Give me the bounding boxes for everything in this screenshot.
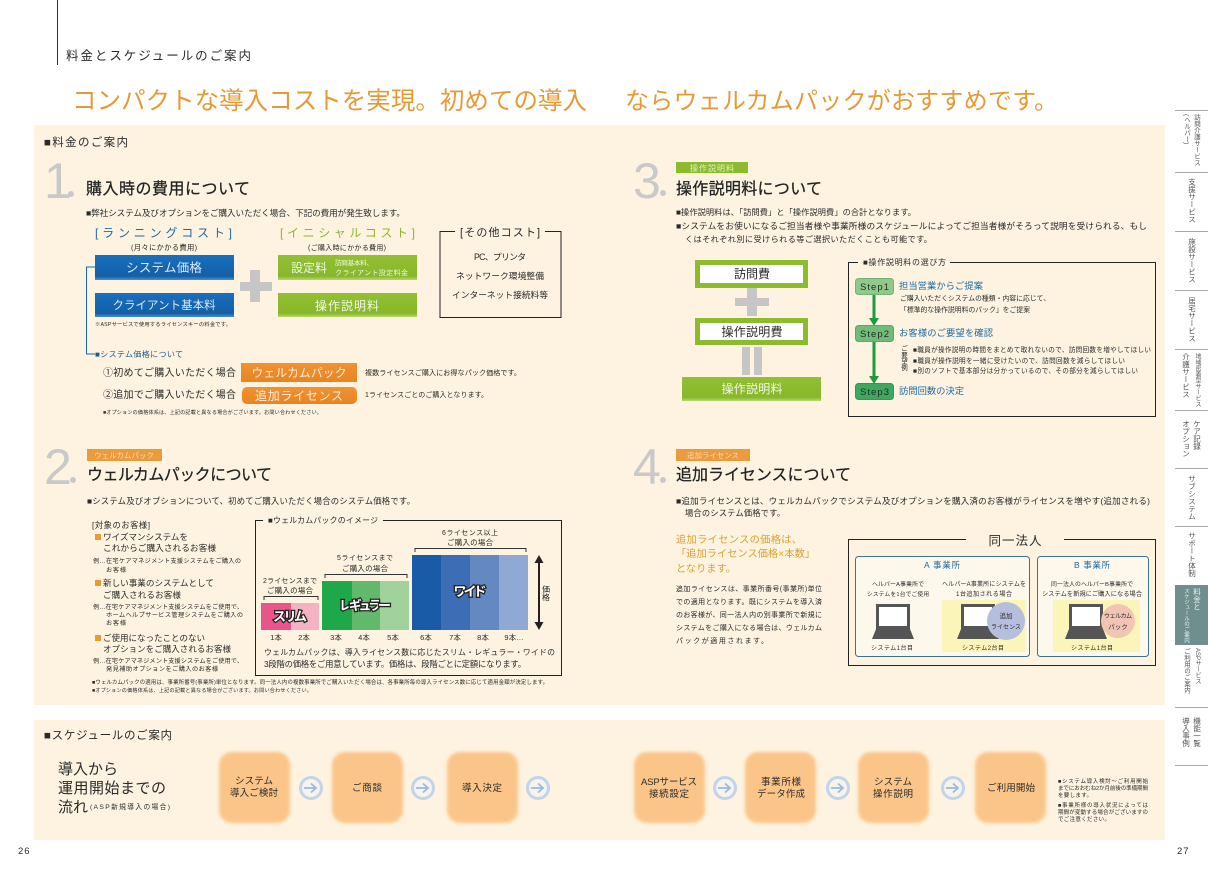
section 3 intro: ■システムをお使いになるご担当者様や事業所様のスケジュールによってご担当者様がそろって説明を受けられる、もし [676, 220, 1147, 231]
formula diagram [682, 262, 821, 401]
system price notes: ①初めてご購入いただく場合 [103, 366, 236, 379]
side navigation tabs: サポート体制 [1187, 532, 1196, 578]
section 4 intro: ■追加ライセンスとは、ウェルカムパックでシステム及びオプションを購入済のお客様がライセンスを増やす(追加される) [676, 495, 1150, 506]
section 4 heading: 追加ライセンスについて [676, 466, 851, 484]
schedule note: ■事業所様の導入状況によっては [1058, 801, 1148, 809]
chart: welcome pack image: ■ウェルカムパックのイメージ [268, 516, 378, 525]
active tab [1175, 585, 1208, 645]
icon: laptop with welcome pack: ウェルカム [1104, 612, 1132, 620]
formula diagram: 操作説明費 [722, 324, 782, 339]
brackets and tier captions: 5ライセンスまで [337, 554, 393, 562]
step 2: ■職員が操作説明を一緒に受けたいので、訪問回数を減らしてほしい [913, 356, 1125, 365]
arrow [828, 778, 848, 798]
running cost column: クライアント基本料 [112, 298, 216, 312]
side navigation tabs: 訪問介護サービス [1192, 113, 1201, 166]
initial cost column: 操作説明料 [315, 298, 379, 313]
step arrows [872, 294, 876, 377]
system price notes: 追加ライセンス [255, 388, 343, 403]
side navigation tabs: 支援サービス [1187, 177, 1196, 223]
target customers list: ご使用になったことのない [103, 633, 205, 643]
same corporation diagram: 同一法人 [988, 534, 1042, 548]
target customers list: ホームヘルプサービス管理システムをご購入の [106, 611, 243, 619]
section 4 paragraph: 追加ライセンスは、事業所番号(事業所)単位 [676, 584, 822, 593]
office A: A 事業所 [924, 560, 960, 570]
section 1 heading: 購入時の費用について [86, 180, 250, 198]
step: operation training [858, 752, 929, 823]
section 4 paragraph: パックが適用されます。 [676, 636, 768, 645]
license counts: 5本 [387, 632, 399, 642]
running cost column [95, 226, 234, 328]
section 2 heading: ウェルカムパックについて [87, 466, 272, 484]
target customers list: 発見補助オプションをご購入のお客様 [106, 665, 219, 673]
side navigation tabs: ケア記録 [1192, 420, 1202, 450]
section 2 footnote: ■ウェルカムパックの適用は、事業所番号(事業所)単位となります。同一法人内の複数事業所でご購入いただく場合は、各事業所毎の導入ライセンス数に応じて適用金額が決定します。 [92, 678, 548, 686]
target customers list: 例…在宅ケアマネジメント支援システムをご使用で、 [93, 603, 243, 611]
system price notes: ■オプションの価格体系は、上記の記載と異なる場合がございます。お問い合わせください。 [103, 409, 322, 416]
heading: pricing guide: ■料金のご案内 [44, 135, 128, 149]
other costs box: インターネット接続料等 [452, 289, 548, 300]
step 2: ご要望例 [900, 344, 908, 372]
target customers list: これからご購入されるお客様 [103, 542, 216, 553]
running cost column: ※ASPサービスで使用するライセンスキーの料金です。 [95, 320, 231, 328]
target customers list: 例…在宅ケアマネジメント支援システムをご購入の [93, 557, 241, 565]
heading: schedule guide: ■スケジュールのご案内 [44, 728, 172, 742]
side navigation tabs: サブシステム [1187, 475, 1196, 520]
step 2: ■職員が操作説明の時間をまとめて取れないので、訪問回数を増やしてほしい [913, 345, 1151, 354]
schedule lead text [58, 761, 170, 816]
section 3 intro: くはそれぞれ別に受けられる等ご選択いただくことも可能です。 [685, 234, 932, 244]
system price notes: ②追加でご購入いただく場合 [103, 388, 236, 401]
step 2: Step2 [860, 329, 889, 340]
schedule note: でご注意ください。 [1058, 815, 1110, 823]
arrow [714, 778, 736, 798]
section 2 number: 2 [44, 439, 72, 495]
price callout: となります。 [676, 563, 736, 575]
target customers list: お客様 [106, 566, 127, 574]
step: office data: データ作成 [757, 788, 805, 800]
office B: システムを新規にご購入になる場合 [1042, 590, 1143, 598]
step: consultation: ご商談 [352, 782, 382, 794]
other costs box: PC、プリンタ [474, 252, 526, 262]
running cost column: [ランニングコスト] [95, 226, 232, 240]
step: operation training: システム [874, 777, 912, 788]
section 3 intro [676, 207, 1147, 244]
header rule and section label: 料金とスケジュールのご案内 [66, 48, 251, 63]
tag: operation fee: 操作説明料 [690, 163, 734, 173]
step 2: お客様のご要望を確認 [899, 327, 994, 338]
target customers list: お客様 [106, 619, 127, 627]
step: ASP connection [634, 752, 705, 823]
office A: システムを1台でご使用 [867, 590, 929, 598]
page numbers: 26 [18, 846, 31, 857]
office A [856, 556, 1030, 656]
price arrow: 価格 [542, 584, 550, 602]
connector line [86, 267, 95, 354]
regular bars: レギュラー [339, 598, 391, 613]
tag: welcome pack [87, 449, 162, 461]
initial cost column: 訪問基本料、 [335, 258, 373, 267]
license counts: 6本 [420, 632, 432, 642]
selection steps box: ■操作説明料の選び方 [863, 257, 946, 267]
step: office data: 事業所様 [761, 776, 801, 788]
step 3: 訪問回数の決定 [899, 385, 964, 396]
icon: laptop with welcome pack [1065, 604, 1135, 639]
other costs box: ネットワーク環境整備 [456, 270, 544, 281]
office A: システム1台目 [871, 644, 913, 652]
section 3 number: 3 [633, 153, 661, 209]
price arrow [534, 555, 550, 630]
schedule note: ■システム導入検討〜ご利用開始 [1058, 777, 1148, 785]
license counts: 9本… [504, 632, 524, 642]
step 3 [856, 384, 964, 400]
system price notes: 1ライセンスごとのご購入となります。 [365, 390, 488, 399]
section 1 number: 1 [44, 153, 72, 209]
chart description [264, 647, 555, 669]
system price notes: ■システム価格について [95, 349, 183, 359]
regular bars [322, 581, 409, 630]
office B: システム1台目 [1071, 644, 1113, 652]
step: system review: 導入ご検討 [230, 787, 278, 799]
chart description: ウェルカムパックは、導入ライセンス数に応じたスリム・レギュラー・ワイドの [264, 647, 555, 657]
price callout [676, 533, 815, 575]
brackets and tier captions: 2ライセンスまで [263, 577, 317, 585]
step 1: 担当営業からご提案 [899, 280, 984, 291]
brackets and tier captions [263, 528, 526, 600]
target customers list: ワイズマンシステムを [103, 531, 188, 542]
side navigation tabs: 機能一覧 [1192, 716, 1202, 748]
icon: laptop with welcome pack: パック [1108, 623, 1128, 631]
wide bars [412, 555, 528, 630]
schedule note: を要します。 [1058, 792, 1092, 799]
icon: laptop with additional license [957, 602, 1025, 640]
chart: welcome pack image [256, 514, 562, 676]
side navigation tabs: ASPサービス [1194, 648, 1201, 684]
office A: システム2台目 [962, 644, 1004, 652]
step 2: ■別のソフトで基本部分は分かっているので、その部分を減らしてほしい [913, 366, 1138, 375]
section 2 footnote: ■オプションの価格体系は、上記の記載と異なる場合がございます。お問い合わせください。 [92, 687, 312, 694]
side navigation tabs: 導入事例 [1181, 716, 1190, 748]
office A: 1台追加される場合 [956, 590, 1013, 598]
running cost column: システム価格 [126, 260, 202, 275]
chart description: 3段階の価格をご用意しています。価格は、段階ごとに定額になります。 [264, 659, 526, 669]
license counts: 3本 [330, 632, 342, 642]
running cost column: (月々にかかる費用) [131, 243, 197, 252]
schedule lead text: 流れ [58, 799, 88, 816]
icon: laptop with additional license: 追加 [1000, 611, 1012, 620]
section 4 paragraph: システムをご購入になる場合は、ウェルカム [676, 623, 822, 632]
side navigation tabs: 居宅サービス [1187, 297, 1196, 342]
icon: laptop with additional license: ライセンス [991, 624, 1021, 631]
slim bars [261, 603, 319, 630]
step 1 [856, 278, 1050, 314]
schedule lead text: 運用開始までの [58, 780, 166, 797]
main title: ならウェルカムパックがおすすめです。 [625, 88, 1058, 115]
step 3: Step3 [860, 387, 889, 398]
target customers list: [対象のお客様] [92, 520, 150, 530]
license counts: 8本 [477, 632, 489, 642]
section 1 intro: ■弊社システム及びオプションをご購入いただく場合、下記の費用が発生致します。 [86, 207, 405, 218]
step: ASP connection: ASPサービス [641, 777, 697, 788]
side navigation tabs [1175, 110, 1208, 766]
license counts: 7本 [449, 632, 461, 642]
panel: section 2 welcome pack [44, 439, 562, 694]
office A: ヘルパーA事業所で [872, 580, 924, 588]
arrow [528, 778, 548, 798]
wide bars: ワイド [454, 584, 486, 599]
step: ASP connection: 接続設定 [649, 788, 689, 800]
price callout: 追加ライセンスの価格は、 [676, 533, 802, 546]
step: consultation [332, 752, 403, 823]
office A: ヘルパーA事業所にシステムを [942, 580, 1026, 588]
step: start of use: ご利用開始 [987, 782, 1035, 794]
schedule lead text: (ASP新規導入の場合) [90, 802, 170, 811]
panel: section 4 additional licenses [633, 439, 1156, 666]
panel: pricing background [34, 125, 1165, 705]
side navigation tabs: オプション [1181, 420, 1190, 458]
schedule flow [219, 752, 1046, 823]
side navigation tabs: 料金と [1192, 587, 1202, 611]
target customers list: 例…在宅ケアマネジメント支援システムをご使用で、 [93, 657, 243, 665]
step: start of use [975, 752, 1046, 823]
brackets and tier captions: ご購入の場合 [267, 585, 314, 595]
slim bars: スリム [273, 609, 307, 624]
other costs box [440, 225, 561, 318]
target customers list [92, 520, 243, 673]
initial cost column [278, 226, 417, 317]
office B: 同一法人のヘルパーB事業所で [1051, 580, 1133, 588]
section 2 intro: ■システム及びオプションについて、初めてご購入いただく場合のシステム価格です。 [87, 496, 415, 506]
other costs box: [その他コスト] [460, 226, 540, 239]
license counts: 4本 [358, 632, 370, 642]
brackets and tier captions: ご購入の場合 [342, 563, 388, 573]
formula diagram: 操作説明料 [722, 381, 782, 396]
license counts: 2本 [298, 632, 310, 642]
initial cost column: [イニシャルコスト] [280, 226, 415, 240]
arrow [300, 778, 322, 798]
side navigation tabs: (ヘルパー) [1182, 114, 1191, 144]
brackets and tier captions: 6ライセンス以上 [442, 528, 498, 537]
section 3 intro: ■操作説明料は、「訪問費」と「操作説明費」の合計となります。 [676, 207, 916, 217]
formula diagram: 訪問費 [734, 266, 770, 281]
schedule lead text: 導入から [58, 761, 118, 778]
section 4 paragraph [676, 584, 822, 645]
system price notes: ウェルカムパック [252, 366, 346, 380]
tag: additional license [676, 449, 750, 461]
step: decision: 導入決定 [462, 782, 502, 794]
icon: laptop [872, 604, 914, 639]
side navigation tabs: スケジュールのご案内 [1183, 588, 1190, 644]
section 4 intro: 場合のシステム価格です。 [685, 508, 785, 518]
side navigation tabs: 地域密着型サービス [1194, 352, 1201, 407]
side navigation tabs: 介護サービス [1181, 353, 1190, 398]
step 1: 「標準的な操作説明料のパック」をご提案 [900, 305, 1030, 314]
side navigation tabs: 施設サービス [1187, 237, 1196, 283]
step: operation training: 操作説明 [873, 788, 913, 800]
schedule note [1058, 777, 1148, 823]
system price notes: 複数ライセンスご購入にお得なパック価格です。 [365, 368, 521, 377]
page numbers: 27 [1177, 846, 1190, 857]
office B [1038, 556, 1148, 656]
initial cost column: (ご購入時にかかる費用) [308, 243, 386, 252]
panel: section 3 operation fee [633, 153, 1156, 416]
step: office data [745, 752, 816, 823]
step: decision [447, 752, 518, 823]
section 4 number: 4 [633, 439, 661, 495]
arrow [942, 778, 964, 798]
initial cost column: 設定料 [291, 261, 327, 275]
section 4 paragraph: のお客様が、同一法人内の別事業所で新規に [676, 610, 822, 619]
panel: section 1 purchase costs [44, 153, 561, 416]
step: system review [219, 752, 290, 823]
office B: B 事業所 [1074, 560, 1110, 570]
side navigation tabs: ご利用のご案内 [1182, 647, 1191, 695]
license counts: 1本 [270, 632, 282, 642]
tag: welcome pack: ウェルカムパック [94, 451, 154, 460]
main title [72, 87, 1058, 115]
target customers list: オプションをご購入されるお客様 [103, 644, 231, 654]
section 3 heading: 操作説明料について [676, 180, 822, 198]
system price notes [95, 349, 521, 416]
brackets and tier captions: ご購入の場合 [447, 537, 494, 547]
arrow [412, 778, 434, 798]
schedule note: までにおおむね2か月前後の準備期間 [1058, 784, 1148, 792]
target customers list: 新しい事業のシステムとして [103, 577, 214, 588]
page numbers [18, 846, 1190, 857]
step 2 [856, 326, 1151, 375]
section 4 paragraph: での適用となります。既にシステムを導入済 [676, 597, 822, 606]
main title: コンパクトな導入コストを実現。初めての導入 [72, 87, 587, 115]
section 2 footnote [92, 678, 548, 694]
step 1: ご購入いただくシステムの種類・内容に応じて、 [900, 294, 1050, 302]
section 4 intro [676, 495, 1150, 518]
tag: additional license: 追加ライセンス [687, 450, 739, 460]
initial cost column: クライアント設定料金 [335, 268, 408, 277]
selection steps box [848, 256, 1156, 416]
price callout: 「追加ライセンス価格×本数」 [676, 547, 815, 560]
schedule note: 期間が変動する場合がございますの [1058, 808, 1148, 816]
step: system review: システム [235, 776, 273, 787]
same corporation diagram [848, 532, 1156, 666]
step 1: Step1 [860, 282, 889, 293]
panel: schedule background [34, 720, 1165, 840]
license counts [270, 632, 524, 642]
target customers list: ご購入されるお客様 [103, 589, 181, 600]
tag: operation fee [676, 162, 748, 173]
icon: plus [240, 270, 272, 302]
